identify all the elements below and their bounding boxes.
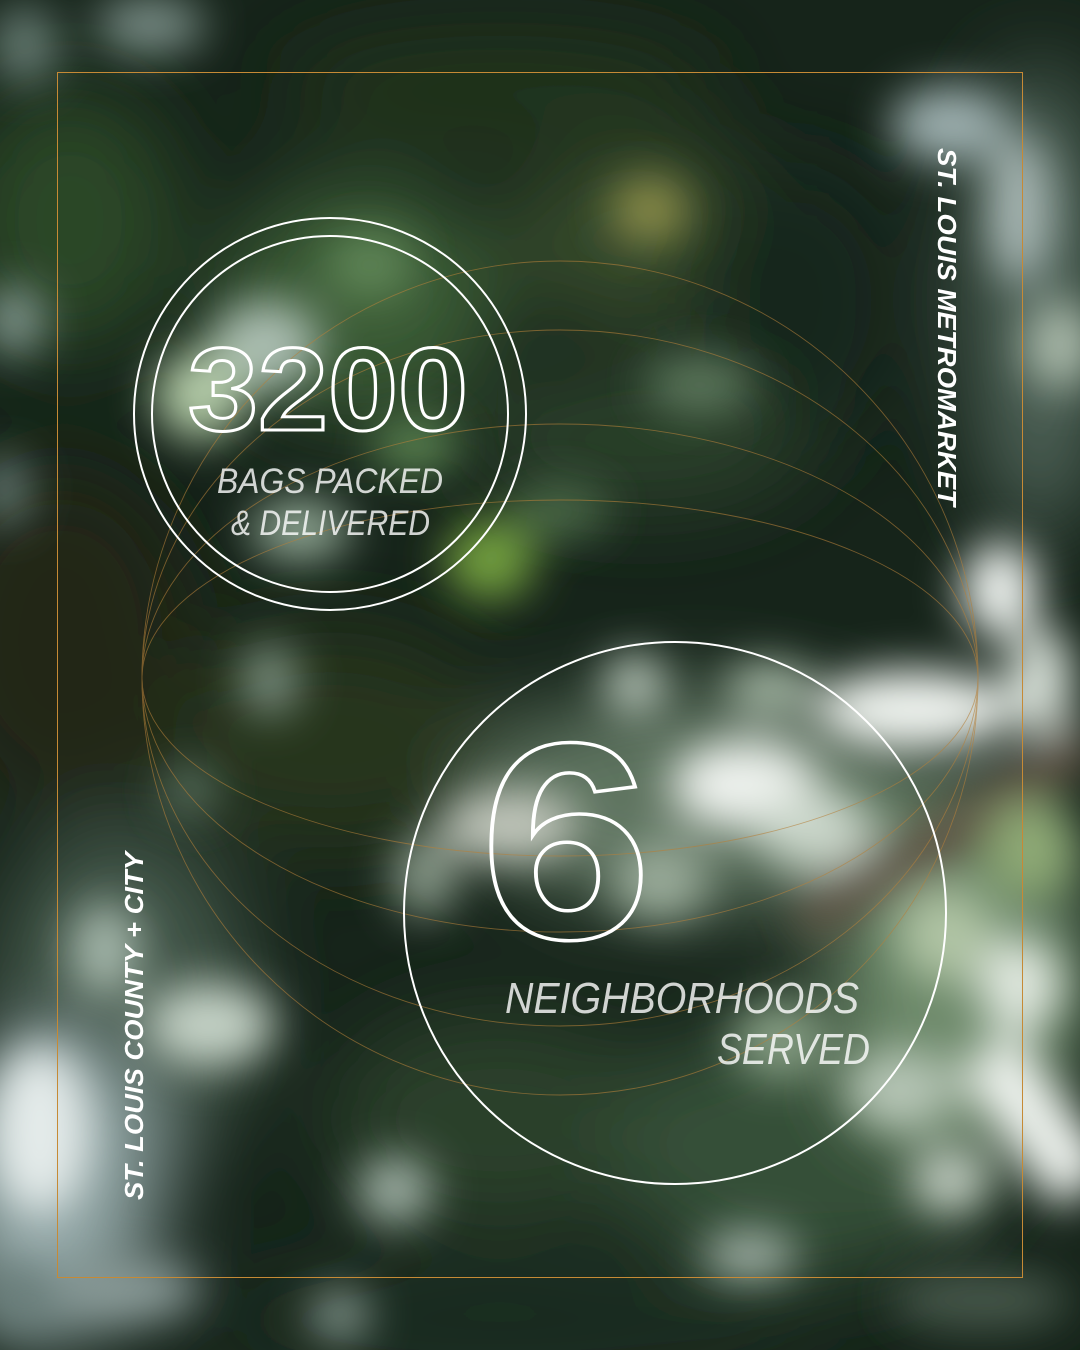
double ring (134, 218, 526, 610)
label: bags packed and delivered: & DELIVERED (231, 504, 430, 543)
highlights, upper half (95, 0, 205, 53)
vertical label: St. Louis MetroMarket: ST. LOUIS METROMARKET (932, 148, 962, 508)
stat: 3200 bags packed and delivered (134, 218, 526, 610)
number 6: 6 (480, 686, 652, 998)
label: bags packed and delivered: BAGS PACKED (217, 462, 443, 501)
large ring (404, 642, 946, 1184)
label: neighborhoods served (505, 974, 870, 1074)
label: bags packed and delivered (217, 462, 443, 543)
brown branch (800, 735, 1080, 920)
label: neighborhoods served: NEIGHBORHOODS (505, 974, 859, 1023)
highlights, lower left (240, 644, 300, 716)
vertical label: St. Louis County + City: ST. LOUIS COUNTY + CITY (119, 849, 149, 1200)
stat: 6 neighborhoods served (404, 642, 946, 1184)
highlights, right side (962, 542, 1038, 638)
label: neighborhoods served: SERVED (717, 1025, 870, 1074)
number 3200: 3200 (188, 324, 468, 456)
orange frame (57, 72, 1023, 1278)
concentric orange ellipses (142, 261, 978, 1095)
